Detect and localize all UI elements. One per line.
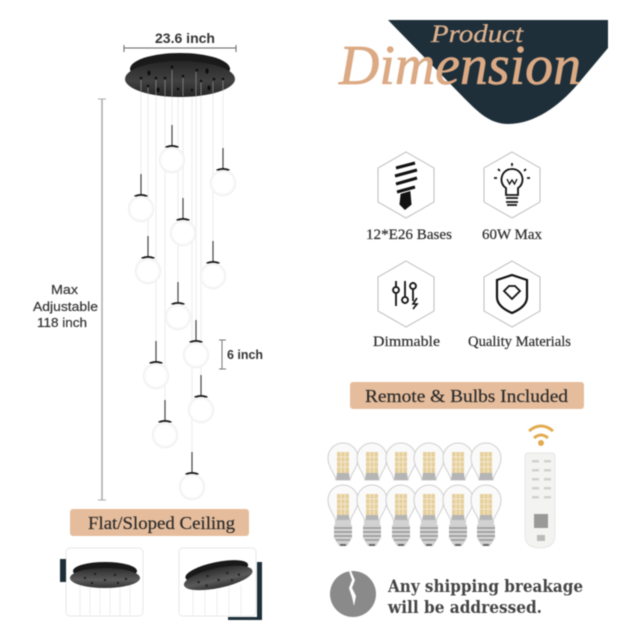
icon: light bulb [494,163,530,205]
feature: quality materials: Quality Materials [468,334,571,350]
suspension wires [141,85,223,452]
feature: 60W max [482,152,543,243]
feature: quality materials [468,261,571,350]
remote control [525,453,555,548]
icon: sliders [393,281,417,309]
max height label: 118 inch [37,315,87,330]
remote heading: Remote & Bulbs Included [365,386,568,406]
globe pendants [128,125,236,500]
notice text: will be addressed. [387,598,542,617]
panel: ceiling types [60,509,262,620]
panel: product dimension title [338,20,608,124]
max height label: Adjustable [33,299,98,314]
max height line [98,99,106,500]
feature: 12*E26 bases: 12*E26 Bases [366,227,452,243]
panel: features [366,152,571,350]
globe height bracket [219,340,226,369]
width label: 23.6 inch [155,31,215,46]
flat ceiling view [60,548,143,616]
icon: cracked circle [330,571,376,617]
panel: remote and bulbs [328,382,584,548]
title: Product: Product [430,21,524,48]
sloped ceiling view [179,548,262,620]
remote heading [350,382,584,409]
notice text: Any shipping breakage [387,577,583,596]
icon: spiral bulb [395,163,417,208]
panel: shipping notice [330,571,583,617]
title backdrop [388,20,608,124]
ceiling heading: Flat/Sloped Ceiling [88,513,235,533]
max height label [33,282,98,330]
ceiling heading [70,509,249,536]
bulbs grid [328,443,501,546]
max height label: Max [51,282,79,297]
icon: shield [497,275,527,313]
width dimension line [124,45,236,52]
feature: 12*E26 bases [366,152,452,243]
feature: dimmable: Dimmable [373,334,440,350]
icon: wifi [529,426,553,444]
title: Dimension: Dimension [338,35,581,97]
feature: dimmable [373,261,440,350]
canopy [125,53,235,97]
panel: chandelier dimension diagram [33,31,263,500]
notice text [387,577,583,617]
feature: 60W max: 60W Max [482,227,543,243]
globe height label: 6 inch [227,348,263,362]
